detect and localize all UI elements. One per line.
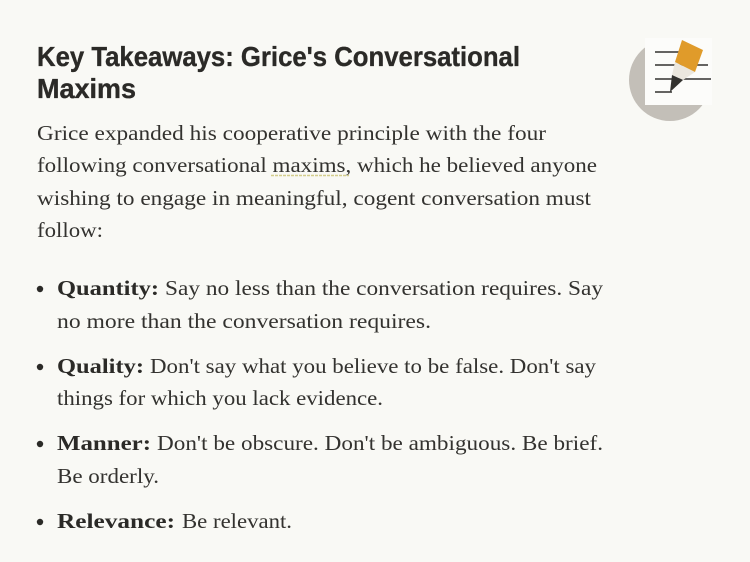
list item: Relevance xyxy=(37,509,292,533)
list item: Quality: Quality: xyxy=(57,354,144,378)
title: Key Takeaways: Grice's Conversational xyxy=(37,41,520,72)
list item: Quantity: Quantity: xyxy=(57,276,159,300)
title xyxy=(37,41,520,104)
intro paragraph: follow: xyxy=(37,218,103,242)
list item: Manner xyxy=(37,431,603,488)
icon: pencil writing on paper xyxy=(629,38,712,121)
intro paragraph: following conversational maxims, which he believed anyone xyxy=(37,153,597,177)
spell-check underline on maxims xyxy=(271,174,349,176)
list item: Quality: Don't say what you believe to be false. Don't say xyxy=(150,354,596,378)
intro paragraph: Grice expanded his cooperative principle with the four xyxy=(37,121,546,145)
list item: Quality: things for which you lack evidence. xyxy=(57,386,383,410)
list item: Quantity: no more than the conversation requires. xyxy=(57,309,431,333)
list item: Manner: Don't be obscure. Don't be ambiguous. Be brief. xyxy=(157,431,603,455)
list item: Manner: Be orderly. xyxy=(57,464,159,488)
list item: Quality xyxy=(37,354,596,410)
list item: Relevance: Be relevant. xyxy=(182,509,292,533)
list item: Quantity xyxy=(37,276,603,333)
title: Maxims xyxy=(37,73,136,104)
list item: Quantity: Say no less than the conversation requires. Say xyxy=(165,276,603,300)
list item: Relevance: Relevance: xyxy=(57,509,175,533)
intro paragraph xyxy=(37,121,597,242)
intro paragraph: wishing to engage in meaningful, cogent conversation must xyxy=(37,186,591,210)
list item: Manner: Manner: xyxy=(57,431,151,455)
